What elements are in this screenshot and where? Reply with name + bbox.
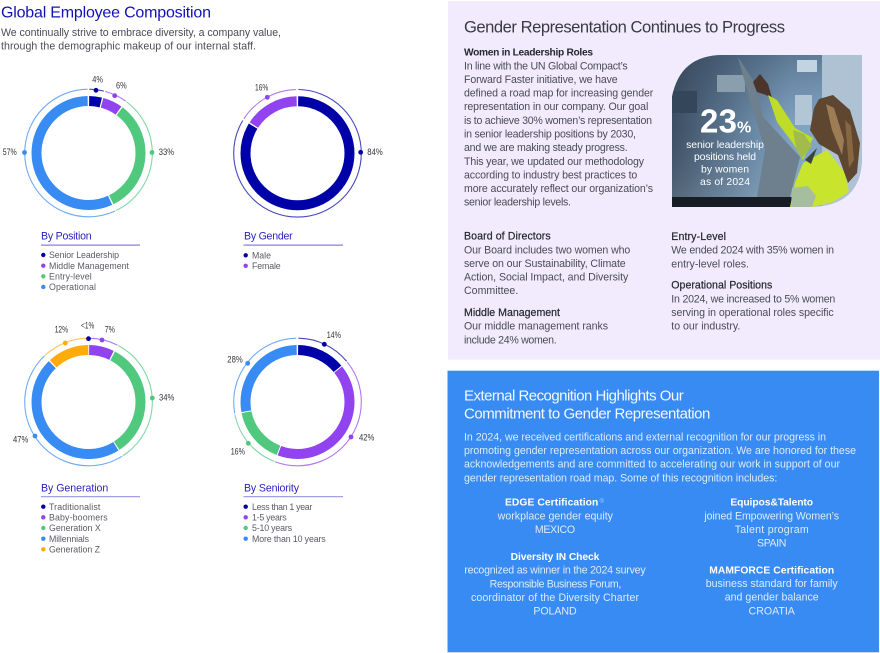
legend: by generation: Generation Z (49, 544, 101, 554)
legend: by seniority: More than 10 years (252, 534, 326, 544)
text block: middle management: Middle Management (464, 307, 560, 319)
text block: women in leadership roles: This year, we updated our methodology (464, 156, 645, 168)
text block: women in leadership roles: defined a road map for increasing gender (464, 88, 654, 100)
value labels (227, 330, 374, 457)
ring segments (234, 90, 361, 217)
value labels: 34% (159, 393, 174, 403)
legend: by generation: Traditionalist (49, 502, 101, 512)
legend: by position: By Position (41, 231, 92, 243)
text block: women in leadership roles: and we are making steady progress. (464, 142, 628, 154)
recognition: Equipos&Talento (703, 498, 839, 550)
donut chart: by seniority (227, 330, 374, 466)
value labels: 4% (92, 75, 103, 85)
text block: operational positions: to our industry. (671, 321, 740, 333)
text block: women in leadership roles (464, 48, 654, 209)
text block: entry-level: entry-level roles. (671, 258, 749, 270)
legend: by generation (41, 482, 140, 554)
donut chart: by gender (234, 83, 383, 217)
legend: by position: Entry-level (49, 272, 92, 282)
legend: by position: Senior Leadership (49, 250, 119, 260)
recognition: Diversity IN Check: recognized as winner in the 2024 survey (464, 565, 646, 577)
value labels: 16% (231, 447, 245, 457)
recognition: Diversity IN Check: Responsible Business Forum, (490, 578, 621, 590)
value labels: 47% (13, 435, 28, 445)
panel heading: External Recognition Highlights Our (464, 388, 684, 405)
value labels: 6% (116, 80, 127, 90)
text block: operational positions: In 2024, we increased to 5% women (671, 293, 835, 305)
text block: women in leadership roles: more accurately reflect our organization’s (464, 183, 653, 195)
text block: board of directors: Committee. (464, 285, 518, 297)
value labels (3, 75, 174, 157)
text block: entry-level (671, 231, 834, 270)
text block: women in leadership roles: Forward Faster initiative, we have (464, 74, 618, 86)
donut chart: by position (3, 75, 174, 217)
legend: by gender: Male (252, 250, 271, 260)
stat caption (686, 140, 764, 188)
recognition: MAMFORCE certification: and gender balance (725, 592, 819, 604)
text block: operational positions (671, 280, 835, 333)
legend: by gender: By Gender (244, 230, 293, 242)
text block: operational positions: Operational Positions (671, 280, 772, 292)
legend: by generation: By Generation (41, 482, 108, 494)
panel: external recognition (448, 371, 879, 652)
value labels: 57% (3, 147, 17, 157)
legend: by generation: Generation X (49, 523, 101, 533)
panel heading: Commitment to Gender Representation (464, 405, 710, 422)
intro text: promoting gender representation across our organization. We are honored for these (464, 445, 856, 457)
text block: women in leadership roles: representation in our company. Our goal (464, 101, 648, 113)
intro text: through the demographic makeup of our internal staff. (1, 40, 256, 52)
stat caption: by women (701, 164, 749, 176)
legend: by seniority: By Seniority (244, 482, 300, 494)
value labels: 33% (159, 147, 174, 157)
value markers (245, 342, 353, 446)
recognition: MAMFORCE certification: CROATIA (749, 605, 796, 617)
legend: by seniority: 1-5 years (252, 512, 287, 522)
panel heading (464, 388, 710, 422)
text block: middle management (464, 307, 608, 346)
value labels: 42% (359, 432, 374, 442)
recognition: EDGE certification: MEXICO (535, 524, 575, 536)
recognition: EDGE certification: workplace gender equity (497, 510, 614, 522)
text block: operational positions: serving in operational roles specific (671, 307, 834, 319)
stat caption: as of 2024 (700, 177, 750, 188)
value labels: 16% (255, 83, 268, 93)
text block: entry-level: Entry-Level (671, 231, 726, 243)
recognition: EDGE certification: ® (600, 498, 604, 505)
photo of woman at a control screen (671, 55, 863, 208)
recognition: Equipos&Talento: Talent program (735, 524, 809, 536)
ring segments (25, 338, 152, 466)
intro text: acknowledgements and are committed to accelerating our work in support of our (464, 459, 840, 471)
text block: women in leadership roles: is to achieve 30% women’s representation (464, 115, 652, 127)
recognition: Diversity IN Check: Diversity IN Check (511, 552, 600, 563)
recognition: Diversity IN Check: POLAND (533, 606, 577, 618)
value labels: 7% (105, 325, 115, 335)
photo callout: 23% (671, 55, 863, 208)
stat: 23%: % (737, 120, 751, 136)
stat caption: positions held (694, 152, 756, 163)
value labels (255, 83, 383, 157)
intro text (1, 27, 281, 52)
legend: by gender (244, 230, 343, 271)
legend: by position (41, 231, 140, 292)
value labels: 28% (227, 355, 243, 365)
recognition: MAMFORCE certification: MAMFORCE Certification (709, 565, 834, 576)
intro text (464, 431, 856, 484)
text block: women in leadership roles: In line with the UN Global Compact’s (464, 60, 628, 72)
title: Global Employee Composition (1, 4, 211, 21)
text block: women in leadership roles: according to industry best practices to (464, 169, 637, 181)
panel heading: Gender Representation Continues to Progress (464, 18, 785, 36)
text block: board of directors: Action, Social Impact, and Diversity (464, 272, 629, 284)
recognition: Equipos&Talento: Equipos&Talento (730, 498, 813, 509)
legend: by seniority: Less than 1 year (252, 502, 312, 512)
text block: board of directors: Board of Directors (464, 230, 551, 242)
legend: by seniority (244, 482, 343, 544)
legend: by position: Middle Management (49, 261, 130, 271)
text block: middle management: include 24% women. (464, 334, 557, 346)
donut chart: by generation (13, 320, 174, 466)
value labels: 14% (327, 330, 341, 340)
text block: board of directors (464, 230, 630, 297)
recognition: EDGE certification: EDGE Certification (505, 498, 598, 509)
legend: by seniority: 5-10 years (252, 523, 293, 533)
recognition: EDGE certification (497, 498, 614, 536)
text block: board of directors: Our Board includes two women who (464, 244, 630, 256)
text block: middle management: Our middle management ranks (464, 321, 608, 333)
value labels: 84% (367, 147, 383, 157)
value markers (22, 88, 154, 155)
recognition: MAMFORCE certification: business standard for family (706, 578, 838, 590)
value markers (265, 95, 363, 155)
legend: by position: Operational (49, 282, 96, 292)
recognition: Diversity IN Check (464, 552, 646, 618)
recognition: MAMFORCE certification (706, 565, 838, 617)
intro text: In 2024, we received certifications and external recognition for our progress in (464, 431, 826, 443)
text block: women in leadership roles: senior leadership levels. (464, 197, 571, 209)
stat: 23%: 23 (700, 102, 737, 140)
legend: by generation: Baby-boomers (49, 512, 108, 522)
value labels: 12% (55, 325, 68, 335)
recognition: Equipos&Talento: joined Empowering Women’s (703, 510, 839, 522)
ring segments (25, 89, 152, 217)
text block: entry-level: We ended 2024 with 35% women in (671, 245, 834, 257)
text block: women in leadership roles: Women in Leadership Roles (464, 48, 593, 59)
intro text: gender representation road map. Some of this recognition includes: (464, 472, 777, 484)
legend: by generation: Millennials (49, 534, 90, 544)
value labels (13, 320, 174, 445)
recognition: Equipos&Talento: SPAIN (757, 538, 786, 550)
legend: by gender: Female (252, 261, 281, 271)
ring segments (234, 338, 361, 466)
intro text: We continually strive to embrace diversity, a company value, (1, 27, 281, 39)
value markers (33, 336, 155, 438)
text block: women in leadership roles: in senior leadership positions by 2030, (464, 128, 636, 140)
recognition: Diversity IN Check: coordinator of the Diversity Charter (471, 592, 639, 604)
value labels: <1% (81, 320, 94, 330)
stat caption: senior leadership (686, 140, 764, 151)
panel: gender representation (448, 1, 880, 360)
text block: board of directors: serve on our Sustainability, Climate (464, 258, 626, 270)
